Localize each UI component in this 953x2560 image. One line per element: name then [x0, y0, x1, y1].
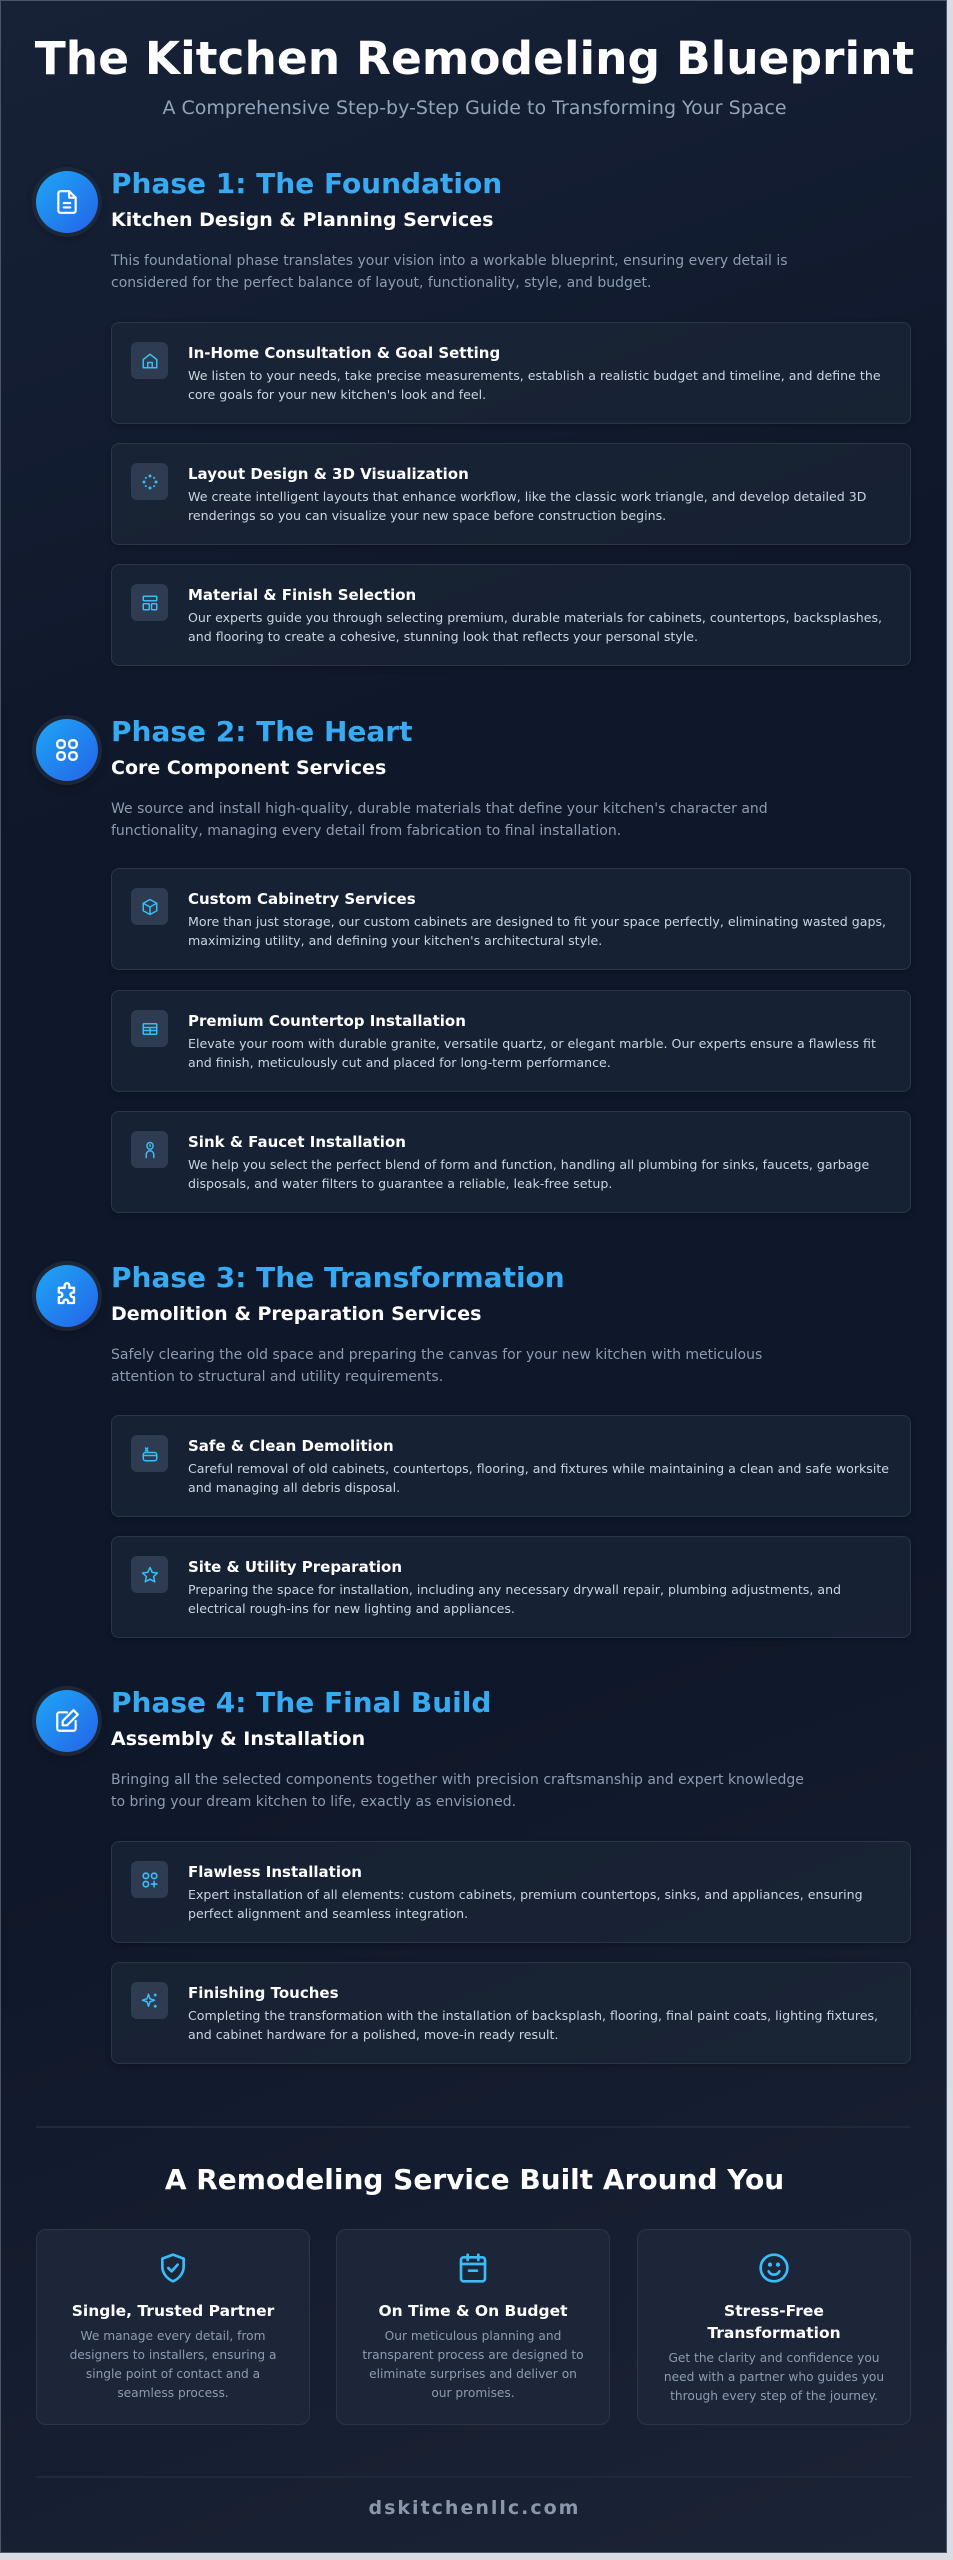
panel: benefit stress-free: Stress-Free: [724, 2302, 824, 2320]
card: demolition: and managing all debris disposal.: [188, 1480, 400, 1495]
footer: dskitchenllc.com: [369, 2497, 580, 2519]
card: layout: [111, 443, 911, 545]
card: consultation: core goals for your new kitchen's look and feel.: [188, 387, 486, 402]
panel: benefit budget: our promises.: [431, 2386, 515, 2400]
panel: benefit budget: [336, 2229, 610, 2425]
card: layout: Layout Design & 3D Visualization: [188, 465, 469, 483]
icon: layout: [131, 584, 168, 621]
text block: This foundational phase translates your vision into a workable blueprint, ensuring every detail is: [111, 253, 788, 269]
text block: We source and install high-quality, durable materials that define your kitchen's character and: [111, 801, 768, 817]
text block: Bringing all the selected components together with precision craftsmanship and expert knowledge: [111, 1772, 804, 1788]
text block: Safely clearing the old space and preparing the canvas for your new kitchen with meticulous: [111, 1347, 762, 1363]
text block: considered for the perfect balance of layout, functionality, style, and budget.: [111, 275, 651, 291]
card: demolition: Careful removal of old cabinets, countertops, flooring, and fixtures while maintaining a clean and safe worksite: [188, 1461, 889, 1476]
card: countertop: Elevate your room with durable granite, versatile quartz, or elegant marble. Our experts ensure a flawless fit: [188, 1036, 876, 1051]
panel: phase 4: [32, 1686, 911, 2064]
icon: home: [131, 342, 168, 379]
card: materials: Material & Finish Selection: [188, 586, 416, 604]
icon: table: [131, 1010, 168, 1047]
card: finishing: Finishing Touches: [188, 1984, 338, 2002]
panel: benefit budget: Our meticulous planning and: [385, 2329, 561, 2343]
panel: benefit stress-free: Transformation: [707, 2324, 841, 2342]
text block: [111, 1772, 804, 1810]
icon: shield: [161, 2253, 185, 2283]
card: sink: Sink & Faucet Installation: [188, 1133, 406, 1151]
text block: attention to structural and utility requirements.: [111, 1369, 443, 1385]
card: cabinetry: [111, 868, 911, 970]
card: site prep: Site & Utility Preparation: [188, 1558, 402, 1576]
card: countertop: Premium Countertop Installation: [188, 1012, 466, 1030]
card: finishing: Completing the transformation with the installation of backsplash, flooring, final paint coats, lighting fixtures,: [188, 2008, 878, 2023]
card: installation: perfect alignment and seamless integration.: [188, 1906, 468, 1921]
icon: calendar: [460, 2253, 486, 2283]
icon: box: [131, 888, 168, 925]
panel: benefit stress-free: [637, 2229, 911, 2425]
card: materials: Our experts guide you through selecting premium, durable materials for cabinets, countertops, backsplashes,: [188, 610, 882, 625]
heading: benefits: A Remodeling Service Built Around You: [165, 2163, 784, 2196]
panel: phase 1: [36, 167, 911, 666]
card: demolition: Safe & Clean Demolition: [188, 1437, 394, 1455]
card: sink: [111, 1111, 911, 1213]
icon: grid: [36, 719, 98, 781]
text block: [111, 801, 768, 839]
text block: [110, 253, 788, 291]
card: installation: [111, 1841, 911, 1943]
icon: document: [36, 171, 98, 233]
card: materials: [111, 564, 911, 666]
panel: benefit budget: eliminate surprises and deliver on: [369, 2367, 577, 2381]
panel: phase 3: [32, 1261, 911, 1638]
card: demolition: [111, 1415, 911, 1517]
panel: benefit stress-free: need with a partner who guides you: [664, 2370, 884, 2384]
text block: to bring your dream kitchen to life, exactly as envisioned.: [111, 1794, 516, 1810]
card: countertop: and finish, meticulously cut and placed for long-term performance.: [188, 1055, 611, 1070]
text block: [111, 1347, 762, 1385]
icon: grid plus: [131, 1861, 168, 1898]
panel: benefit budget: transparent process are designed to: [362, 2348, 584, 2362]
card: layout: We create intelligent layouts that enhance workflow, like the classic work triangle, and develop detailed 3D: [188, 489, 866, 504]
panel: benefit partner: Single, Trusted Partner: [72, 2302, 274, 2320]
card: sink: disposals, and water filters to guarantee a reliable, leak-free setup.: [188, 1176, 612, 1191]
subheading: Assembly & Installation: [111, 1728, 365, 1750]
icon: faucet: [131, 1131, 168, 1168]
panel: benefit partner: [36, 2229, 310, 2425]
text block: functionality, managing every detail from fabrication to final installation.: [111, 823, 621, 839]
icon: dots: [131, 463, 168, 500]
subheading: Kitchen Design & Planning Services: [111, 209, 493, 231]
panel: benefit budget: On Time & On Budget: [378, 2302, 568, 2320]
panel: benefit partner: designers to installers, ensuring a: [70, 2348, 276, 2362]
title: The Kitchen Remodeling Blueprint: [35, 32, 914, 85]
card: finishing: and cabinet hardware for a polished, move-in ready result.: [188, 2027, 559, 2042]
card: consultation: [111, 322, 911, 424]
card: installation: Expert installation of all elements: custom cabinets, premium countertops, sinks, and appliances, ensuring: [188, 1887, 863, 1902]
icon: bin: [131, 1435, 168, 1472]
card: cabinetry: Custom Cabinetry Services: [188, 890, 416, 908]
card: installation: Flawless Installation: [188, 1863, 362, 1881]
heading: Phase 1: The Foundation: [111, 167, 502, 200]
card: cabinetry: maximizing utility, and defining your kitchen's architectural style.: [188, 933, 602, 948]
panel: benefit partner: single point of contact and a: [86, 2367, 260, 2381]
panel: benefit partner: seamless process.: [117, 2386, 229, 2400]
card: layout: renderings so you can visualize your new space before construction begins.: [188, 508, 666, 523]
icon: smile: [759, 2253, 789, 2283]
icon: sparkles: [131, 1982, 168, 2019]
subheading: Core Component Services: [111, 757, 386, 779]
card: consultation: In-Home Consultation & Goal Setting: [188, 344, 500, 362]
icon: puzzle: [36, 1265, 98, 1327]
card: consultation: We listen to your needs, take precise measurements, establish a realistic budget and timeline, and define the: [188, 368, 881, 383]
card: site prep: Preparing the space for installation, including any necessary drywall repair, plumbing adjustments, and: [188, 1582, 841, 1597]
panel: benefit stress-free: through every step of the journey.: [670, 2389, 878, 2403]
card: materials: and flooring to create a cohesive, stunning look that reflects your personal style.: [188, 629, 698, 644]
subheading: Demolition & Preparation Services: [111, 1303, 481, 1325]
card: finishing: [111, 1962, 911, 2064]
card: site prep: [111, 1536, 911, 1638]
icon: star: [131, 1556, 168, 1593]
panel: benefit stress-free: Get the clarity and confidence you: [668, 2351, 880, 2365]
subtitle: A Comprehensive Step-by-Step Guide to Transforming Your Space: [162, 97, 787, 119]
heading: Phase 4: The Final Build: [111, 1686, 491, 1719]
heading: Phase 3: The Transformation: [111, 1261, 565, 1294]
icon: pencil: [36, 1690, 98, 1752]
card: countertop: [111, 990, 911, 1092]
panel: benefit partner: We manage every detail, from: [80, 2329, 266, 2343]
card: site prep: electrical rough-ins for new lighting and appliances.: [188, 1601, 515, 1616]
card: cabinetry: More than just storage, our custom cabinets are designed to fit your space perfectly, eliminating wasted gaps,: [188, 914, 886, 929]
heading: Phase 2: The Heart: [111, 715, 412, 748]
panel: phase 2: [32, 715, 911, 1213]
card: sink: We help you select the perfect blend of form and function, handling all plumbing for sinks, faucets, garbage: [188, 1157, 869, 1172]
